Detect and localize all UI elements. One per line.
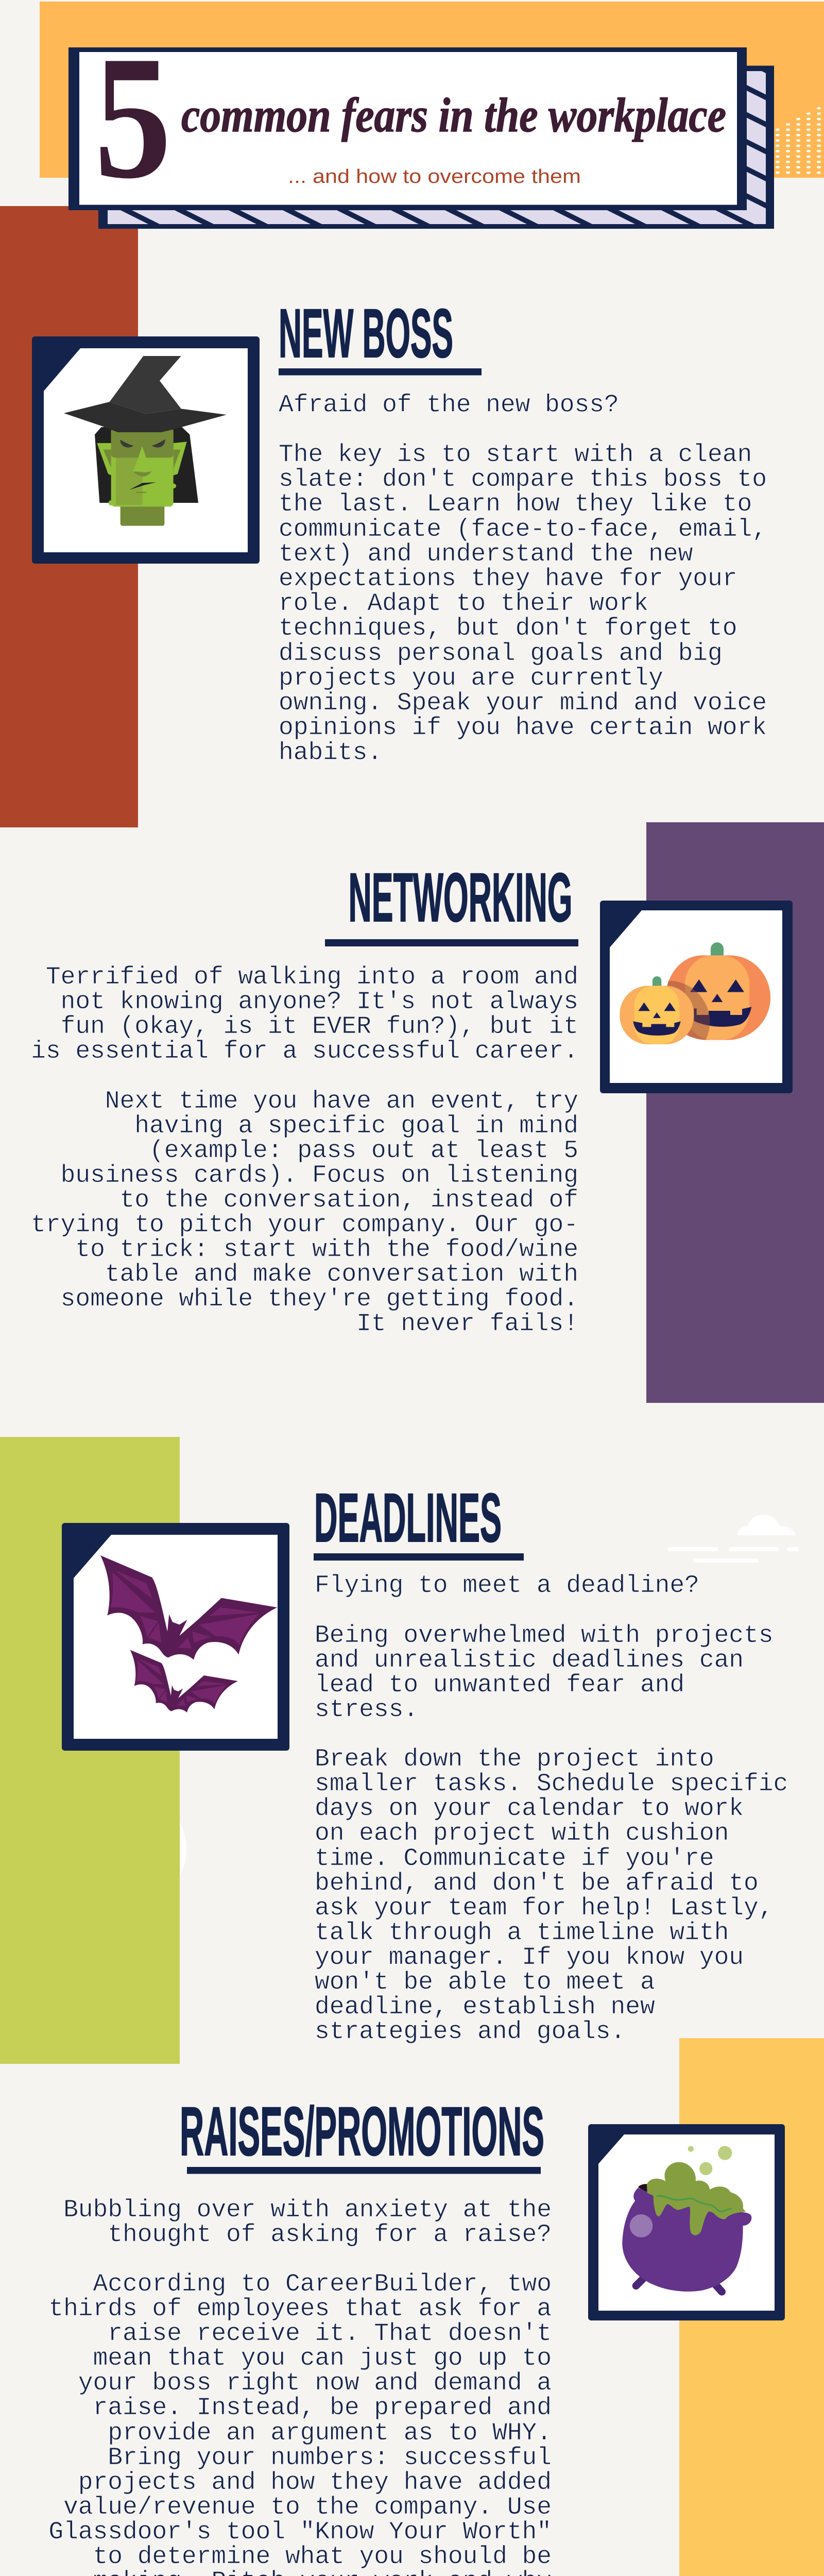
panel: raises colour block bbox=[679, 2038, 824, 2576]
text block: deadlines: ask your team for help! Lastly, bbox=[315, 1894, 773, 1922]
text block: raises/promotions: raise. Instead, be prepared and bbox=[93, 2394, 552, 2422]
text block: new boss: the last. Learn how they like to bbox=[279, 490, 752, 518]
text block: networking: It never fails! bbox=[356, 1310, 578, 1338]
heading: new boss: NEW BOSS bbox=[279, 295, 453, 372]
heading: raises/promotions bbox=[180, 2093, 544, 2174]
text block: networking bbox=[31, 963, 578, 1338]
header: orange block and dot pattern bbox=[40, 2, 824, 178]
text block: networking: table and make conversation with bbox=[105, 1261, 578, 1289]
text block: new boss: slate: don't compare this boss to bbox=[279, 466, 767, 494]
text block: deadlines bbox=[315, 1572, 788, 2046]
text block: new boss: projects you are currently bbox=[279, 665, 663, 692]
text block: deadlines: strategies and goals. bbox=[315, 2018, 625, 2046]
text block: new boss: discuss personal goals and big bbox=[279, 640, 723, 668]
heading: new boss bbox=[279, 295, 482, 375]
text block: networking: someone while they're getting food. bbox=[61, 1285, 578, 1313]
big bat bbox=[100, 1555, 277, 1660]
text block: deadlines: on each project with cushion bbox=[315, 1820, 729, 1848]
text block: raises/promotions: Bring your numbers: successful bbox=[108, 2444, 552, 2472]
heading: deadlines: DEADLINES bbox=[314, 1480, 502, 1556]
heading: networking bbox=[325, 859, 578, 946]
text: NETWORKING bbox=[348, 859, 573, 936]
text block: deadlines: behind, and don't be afraid to bbox=[315, 1870, 759, 1897]
heading: deadlines bbox=[314, 1480, 524, 1561]
text block: raises/promotions: value/revenue to the company. Use bbox=[63, 2494, 552, 2521]
text block: raises/promotions: Bubbling over with anxiety at the bbox=[63, 2196, 552, 2224]
small bat bbox=[130, 1650, 238, 1713]
text block: new boss: role. Adapt to their work bbox=[279, 590, 648, 618]
text block: raises/promotions: your boss right now and demand a bbox=[78, 2369, 552, 2397]
text block: raises/promotions: projects and how they have added bbox=[78, 2469, 552, 2497]
icon: cauldron bbox=[588, 2124, 785, 2320]
text block: networking: trying to pitch your company. Our go- bbox=[31, 1211, 578, 1239]
text block: raises/promotions: thought of asking for a raise? bbox=[108, 2221, 552, 2249]
panel: networking colour block bbox=[646, 822, 824, 1403]
text block: new boss: expectations they have for your bbox=[279, 565, 737, 593]
text block: networking: not knowing anyone? It's not always bbox=[61, 988, 578, 1016]
text block: networking: business cards). Focus on listening bbox=[61, 1162, 578, 1190]
icon: bats bbox=[62, 1523, 289, 1751]
icon: pumpkins bbox=[600, 901, 793, 1093]
text block: networking: Terrified of walking into a room and bbox=[46, 963, 578, 991]
text block: raises/promotions: raise receive it. That doesn't bbox=[108, 2320, 552, 2348]
text block: deadlines: won't be able to meet a bbox=[315, 1969, 655, 1996]
text block: new boss: communicate (face-to-face, email, bbox=[279, 516, 767, 544]
title: common fears in the workplace: common fears in the workplace bbox=[181, 89, 726, 142]
title card bbox=[68, 20, 747, 215]
text block: new boss: owning. Speak your mind and voice bbox=[279, 689, 767, 717]
decoration: moon behind deadlines block bbox=[123, 1805, 186, 1893]
text block: networking: Next time you have an event, try bbox=[105, 1088, 578, 1115]
text block: deadlines: and unrealistic deadlines can bbox=[315, 1647, 744, 1674]
text block: new boss: techniques, but don't forget to bbox=[279, 615, 737, 642]
text block: raises/promotions: mean that you can just go up to bbox=[93, 2345, 552, 2372]
text block: deadlines: Being overwhelmed with projects bbox=[315, 1622, 773, 1650]
text block: deadlines: days on your calendar to work bbox=[315, 1795, 744, 1823]
text block: networking: (example: pass out at least 5 bbox=[149, 1137, 578, 1165]
text block: new boss: Afraid of the new boss? bbox=[279, 392, 619, 419]
text block: deadlines: deadline, establish new bbox=[315, 1993, 655, 2021]
text block: raises/promotions: Glassdoor's tool "Know Your Worth" bbox=[48, 2518, 552, 2546]
text block: raises/promotions bbox=[48, 2196, 552, 2576]
icon: witch bbox=[32, 336, 260, 564]
text block: deadlines: your manager. If you know you bbox=[315, 1944, 744, 1972]
text block: deadlines: talk through a timeline with bbox=[315, 1919, 729, 1947]
text block: deadlines: smaller tasks. Schedule specific bbox=[315, 1770, 788, 1798]
text block: raises/promotions: to determine what you should be bbox=[93, 2543, 552, 2571]
text block: deadlines: lead to unwanted fear and bbox=[315, 1671, 684, 1699]
text block: new boss: text) and understand the new bbox=[279, 540, 693, 568]
decoration: white cloud bbox=[667, 1515, 799, 1563]
subtitle: ... and how to overcome them bbox=[288, 166, 581, 188]
text block: networking: is essential for a successful career. bbox=[31, 1038, 578, 1065]
panel: new boss colour block bbox=[0, 206, 138, 827]
text block: new boss bbox=[279, 392, 767, 767]
text block: networking: to trick: start with the food/wine bbox=[75, 1236, 578, 1264]
text block: deadlines: stress. bbox=[315, 1696, 418, 1724]
text block: new boss: habits. bbox=[279, 739, 382, 767]
text block: raises/promotions: According to CareerBuilder, two bbox=[93, 2270, 552, 2298]
text block: networking: fun (okay, is it EVER fun?), but it bbox=[61, 1013, 578, 1041]
text block: raises/promotions: provide an argument as to WHY. bbox=[108, 2419, 552, 2447]
text block: deadlines: Flying to meet a deadline? bbox=[315, 1572, 699, 1600]
text block: deadlines: Break down the project into bbox=[315, 1745, 714, 1773]
text block: new boss: opinions if you have certain work bbox=[279, 714, 767, 742]
text block: raises/promotions: thirds of employees that ask for a bbox=[48, 2295, 552, 2323]
panel: deadlines colour block bbox=[0, 1437, 180, 2064]
text block: networking: having a specific goal in mind bbox=[134, 1112, 578, 1140]
text block: new boss: The key is to start with a clean bbox=[279, 441, 752, 469]
title: number 5: 5 bbox=[94, 20, 171, 215]
text block: deadlines: time. Communicate if you're bbox=[315, 1845, 714, 1873]
title card shadow with stripes bbox=[98, 66, 774, 229]
text block: networking: to the conversation, instead of bbox=[120, 1187, 578, 1214]
